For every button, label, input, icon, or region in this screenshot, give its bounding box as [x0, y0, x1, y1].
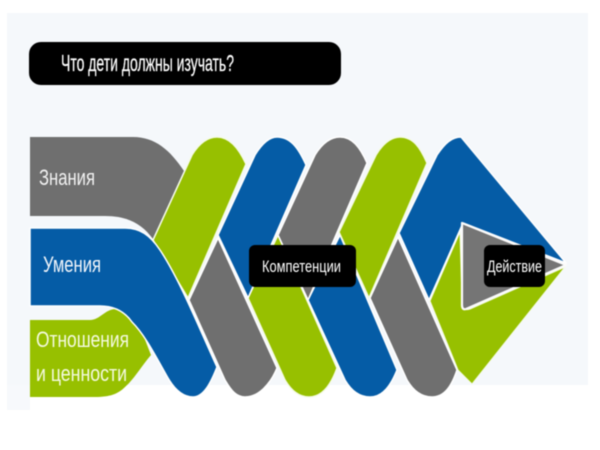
band: green up 1: [153, 137, 246, 298]
band: blue up: [218, 137, 306, 298]
arrow head: blue: [399, 137, 566, 300]
label: Действие: [484, 245, 545, 287]
band: green down: [248, 235, 337, 397]
strand: Отношения и ценности: [30, 309, 151, 397]
band: green up 2: [339, 137, 427, 298]
strand: Знания: Знания: [39, 165, 95, 190]
label: Действие: Действие: [487, 258, 542, 276]
title pill: Что дети должны изучать?: [61, 50, 234, 76]
arrow head: green: [430, 232, 565, 384]
band: gray up: [278, 137, 367, 300]
label: Компетенции: Компетенции: [262, 258, 341, 276]
strand: Знания: [30, 137, 184, 239]
band: blue down: [308, 235, 397, 397]
label: Компетенции: [249, 245, 356, 287]
arrow head: gray triangle: [462, 223, 566, 309]
title pill: [29, 42, 341, 85]
band: gray down 2: [370, 237, 457, 397]
strand: Отношения и ценности: и ценности: [36, 361, 127, 386]
band: gray down 1: [189, 238, 277, 397]
strand: Умения: [30, 228, 217, 397]
strand: Умения: Умения: [43, 252, 101, 277]
strand: Отношения и ценности: Отношения: [36, 327, 129, 352]
woven strands diagram: [30, 137, 566, 397]
